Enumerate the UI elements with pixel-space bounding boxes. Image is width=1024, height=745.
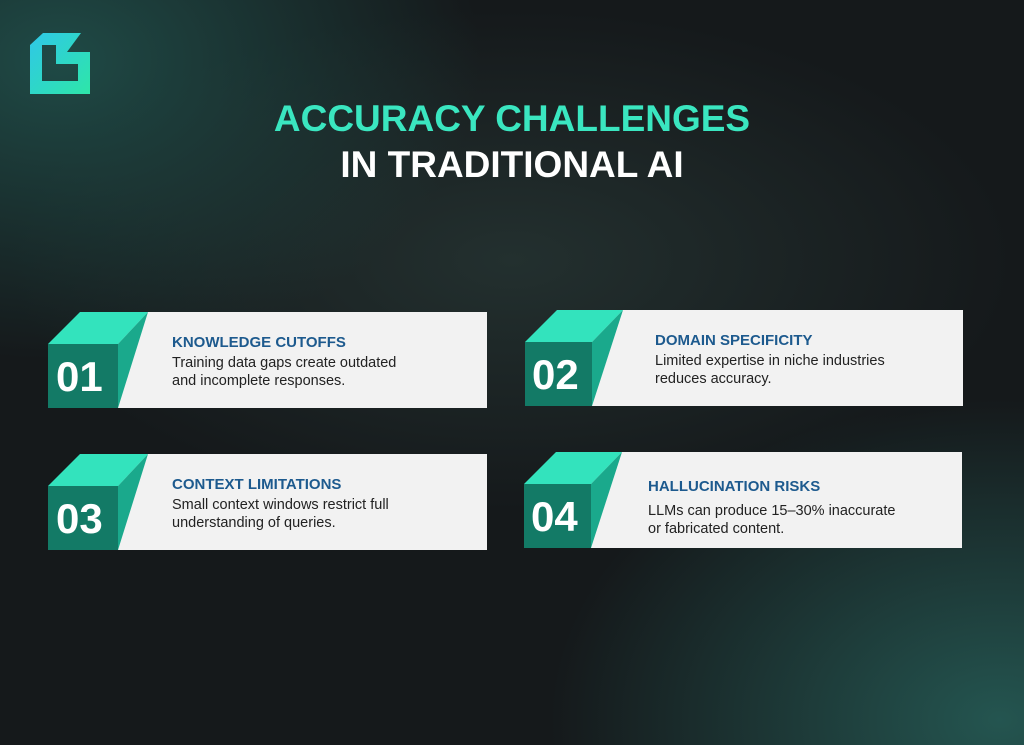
card 04: 04	[531, 493, 578, 540]
card 03: 03	[56, 495, 103, 542]
card 01: Training data gaps create outdated	[172, 355, 396, 371]
card 01: KNOWLEDGE CUTOFFS	[172, 334, 346, 351]
card 02: 02	[532, 351, 579, 398]
card 01: 01	[56, 353, 103, 400]
card 02: DOMAIN SPECIFICITY	[655, 332, 813, 349]
title: IN TRADITIONAL AI	[340, 144, 684, 185]
card 01	[48, 312, 487, 408]
logo	[30, 33, 90, 94]
card 03: Small context windows restrict full	[172, 497, 389, 513]
card 02	[525, 310, 963, 406]
card 04: or fabricated content.	[648, 521, 784, 537]
card 04: LLMs can produce 15–30% inaccurate	[648, 503, 895, 519]
card 02: reduces accuracy.	[655, 371, 772, 387]
card 04: HALLUCINATION RISKS	[648, 478, 820, 495]
title	[274, 98, 750, 185]
card 03: CONTEXT LIMITATIONS	[172, 476, 341, 493]
card 03	[48, 454, 487, 550]
card 03: understanding of queries.	[172, 515, 336, 531]
card 02: Limited expertise in niche industries	[655, 353, 885, 369]
card 01: and incomplete responses.	[172, 373, 345, 389]
card 04	[524, 452, 962, 548]
title: ACCURACY CHALLENGES	[274, 98, 750, 139]
